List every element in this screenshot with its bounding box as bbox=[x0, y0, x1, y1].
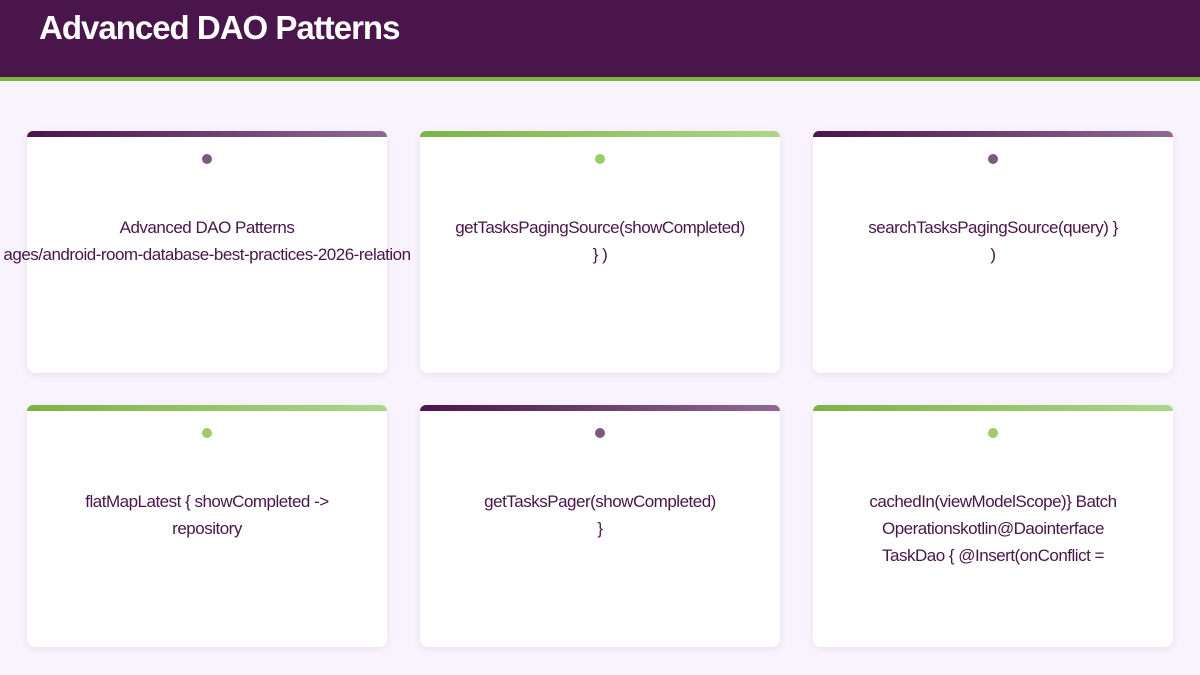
card 3: ) bbox=[990, 245, 996, 264]
card 1: ages/android-room-database-best-practices-2026-relation bbox=[3, 245, 411, 264]
card 3: searchTasksPagingSource(query) } bbox=[868, 218, 1118, 237]
card 1 bbox=[27, 131, 387, 373]
card 4 bbox=[27, 405, 387, 647]
card 1: Advanced DAO Patterns bbox=[120, 218, 294, 237]
card 5: } bbox=[597, 519, 603, 538]
card 5 bbox=[420, 405, 780, 647]
card 2: } ) bbox=[593, 245, 607, 264]
header bbox=[0, 0, 1200, 81]
card 5: getTasksPager(showCompleted) bbox=[484, 492, 716, 511]
header: Advanced DAO Patterns bbox=[39, 9, 399, 46]
card 6 bbox=[813, 405, 1173, 647]
card 2: getTasksPagingSource(showCompleted) bbox=[455, 218, 745, 237]
card 3 bbox=[813, 131, 1173, 373]
card 4: flatMapLatest { showCompleted -> bbox=[85, 492, 329, 511]
card 6: Operationskotlin@Daointerface bbox=[882, 519, 1104, 538]
card 6: TaskDao { @Insert(onConflict = bbox=[882, 546, 1104, 565]
card 6: cachedIn(viewModelScope)} Batch bbox=[869, 492, 1117, 511]
card 4: repository bbox=[172, 519, 242, 538]
card 2 bbox=[420, 131, 780, 373]
